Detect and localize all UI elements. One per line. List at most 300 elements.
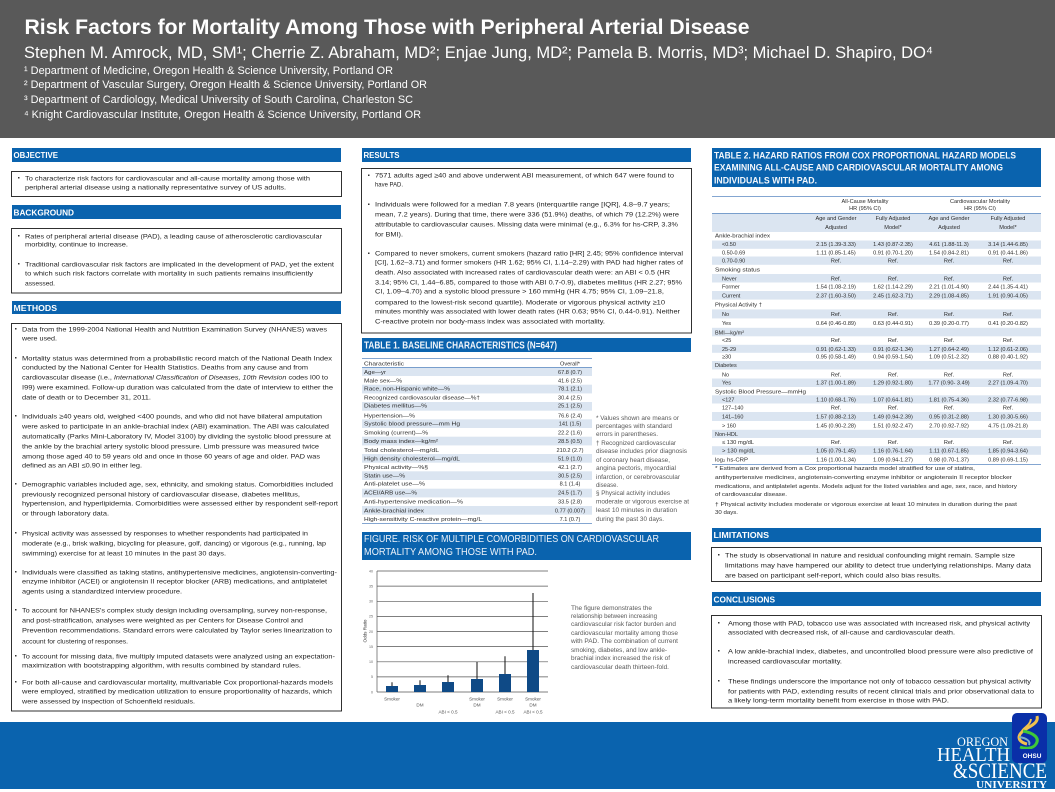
heading: results: [362, 148, 691, 162]
table 2: hazard ratios: 0.64 (0.46-0.89): [816, 321, 856, 327]
table 2: hazard ratios: Ref.: [944, 440, 955, 446]
header band: [0, 0, 1055, 138]
heading: results: RESULTS: [364, 151, 400, 160]
panel: methods: conducted by the National Center for Health Statistics. Deaths from any cause and from: [22, 364, 308, 372]
panel: methods: and post-stratification, analyses were weighted as per Centers for Disease Control and: [22, 618, 303, 624]
heading: table 2: TABLE 2. HAZARD RATIOS FROM COX PROPORTIONAL HAZARD MODELS: [714, 150, 1016, 160]
table 2: hazard ratios: Ref.: [888, 440, 899, 446]
table 2: hazard ratios: 0.98 (0.70-1.37): [929, 457, 969, 463]
table 1: baseline characteristics: 78.1 (2.1): [558, 387, 582, 393]
table 1: baseline characteristics: 0.77 (0.007): [555, 509, 585, 515]
table 2: hazard ratios: 0.91 (0.70-1.20): [873, 250, 913, 256]
logo: OHSU wordmark: HEALTH: [937, 744, 1010, 766]
table 1 footnotes: § Physical activity includes: [596, 490, 670, 497]
table 2: hazard ratios: 1.09 (0.51-2.32): [929, 355, 969, 361]
table 2: hazard ratios: 25-29: [722, 347, 736, 353]
table 2 footnotes: † Physical activity includes moderate or vigorous exercise at least 10 minutes in duration during the past: [715, 502, 1018, 508]
logo: OHSU wordmark: [937, 734, 1047, 791]
panel: objective: To characterize risk factors for cardiovascular and all-cause mortality among those with: [25, 176, 310, 182]
panel: methods: or through laboratory data.: [22, 510, 109, 518]
panel: limitations: limitations may have hampered our ability to detect true underlying relationships. Many data: [725, 562, 1031, 570]
table 2: hazard ratios: Ref.: [1003, 406, 1014, 412]
table 2: hazard ratios: 1.54 (1.08-2.19): [816, 285, 856, 291]
bar chart: odds ratio by comorbidity: DM: [529, 702, 537, 708]
table 2: hazard ratios: 2.70 (0.92-7.92): [929, 424, 969, 430]
panel: results: Compared to never smokers, current smokers (hazard ratio [HR] 2.45; 95% confidence interval: [375, 250, 684, 258]
table 2: hazard ratios: 4.75 (1.09-21.8): [988, 424, 1028, 430]
bar chart: odds ratio by comorbidity: Smoker: [469, 696, 485, 702]
heading: figure: MORTALITY AMONG THOSE WITH PAD.: [364, 547, 537, 558]
table 2: hazard ratios: Fully Adjusted: [991, 216, 1025, 222]
heading: limitations: LIMITATIONS: [714, 531, 770, 540]
panel: background: [12, 228, 342, 293]
table 2: hazard ratios: 1.85 (0.94-3.64): [988, 448, 1028, 454]
figure caption: cardiovascular mortality among those: [571, 630, 679, 637]
table 1: baseline characteristics: 141 (1.5): [559, 422, 581, 428]
bar chart: odds ratio by comorbidity: 10: [369, 660, 373, 664]
panel: results: death. Also associated with increased rates of cardiovascular death were: an ABI < 0.5 (HR: [375, 270, 670, 276]
panel: methods: were used.: [21, 336, 57, 342]
table 1: baseline characteristics: 33.5 (2.8): [558, 499, 582, 505]
table 2: hazard ratios: 2.15 (1.39-3.33): [816, 242, 856, 248]
table 1: baseline characteristics: 42.1 (2.7): [558, 465, 582, 471]
table 2: hazard ratios: Ref.: [888, 312, 899, 318]
table 1: baseline characteristics: 210.2 (2.7): [556, 448, 584, 454]
table 1: baseline characteristics: Diabetes mellitus—%: [364, 404, 427, 410]
table 2: hazard ratios: Ref.: [888, 276, 899, 282]
panel: background: to which such risk factors correlate with mortality in such patients remains insufficiently: [25, 270, 314, 278]
bar chart: odds ratio by comorbidity: Odds Ratio: [362, 619, 368, 642]
table 2: hazard ratios: 2.45 (1.62-3.71): [873, 293, 913, 299]
panel: methods: defined as an ABI ≤0.90 in either leg.: [22, 462, 142, 470]
table 2: hazard ratios: <127: [722, 397, 734, 403]
panel: methods: swimming) exercise for at least 10 minutes in the past 30 days.: [22, 550, 226, 558]
bar chart: odds ratio by comorbidity: 5: [371, 675, 373, 679]
panel: conclusions: These findings underscore the importance not only of tobacco cessation but physical activity: [728, 678, 1032, 686]
table 2: hazard ratios: 1.16 (1.00-1.34): [816, 457, 856, 463]
table 2: hazard ratios: Ref.: [888, 338, 899, 344]
table 1: baseline characteristics: Recognized cardiovascular disease—%†: [364, 395, 480, 401]
panel: conclusions: Among those with PAD, tobacco use was associated with increased risk, and physical activity: [728, 620, 1031, 628]
authors: Stephen M. Amrock, MD, SM¹; Cherrie Z. Abraham, MD²; Enjae Jung, MD²; Pamela B. Morris, MD³; Michael D. Shapiro, DO⁴: [24, 43, 933, 62]
table 1: baseline characteristics: Smoking (current)—%: [364, 430, 428, 436]
table 1: baseline characteristics: 8.1 (1.4): [560, 482, 581, 488]
table 2: hazard ratios: 0.95 (0.58-1.49): [816, 355, 856, 361]
table 1: baseline characteristics: Statin use—%: [364, 474, 405, 480]
panel: methods: were asked to participate in an ankle-brachial index (ABI) examination. The ABI was calculated: [21, 424, 329, 430]
table 2: hazard ratios: No: [722, 312, 729, 318]
panel: results: C-reactive protein nor body-mass index was associated with mortality.: [375, 318, 605, 326]
table 2: hazard ratios: BMI—kg/m²: [715, 330, 744, 336]
table 1: baseline characteristics: 30.5 (2.5): [558, 474, 582, 480]
table 2: hazard ratios: 1.57 (0.88-2.13): [816, 414, 856, 420]
panel: background: Traditional cardiovascular risk factors are implicated in the development of PAD, yet the extent: [25, 262, 334, 268]
panel: methods: Prevention recommendations. Standard errors were calculated by Taylor series linearization to: [22, 628, 332, 634]
table 1 footnotes: moderate or vigorous exercise at: [596, 498, 689, 506]
panel: objective: peripheral arterial disease using a nationally representative survey of US adults.: [25, 184, 286, 192]
heading: table 2: [712, 148, 1041, 187]
table 2: hazard ratios: Ref.: [1003, 338, 1014, 344]
table 1: baseline characteristics: Ankle-brachial index: [364, 509, 424, 515]
table 2: hazard ratios: ≥30: [722, 355, 731, 361]
heading: table 2: EXAMINING ALL-CAUSE AND CARDIOVASCULAR MORTALITY AMONG: [714, 162, 1003, 172]
table 1 footnotes: † Recognized cardiovascular: [596, 440, 676, 447]
table 2: hazard ratios: Smoking status: [715, 268, 760, 274]
table 2: hazard ratios: 2.37 (1.60-3.50): [816, 293, 856, 299]
table 2: hazard ratios: [712, 196, 1041, 465]
table 2: hazard ratios: 1.45 (0.90-2.28): [816, 424, 856, 430]
table 1: baseline characteristics: 41.6 (2.5): [558, 379, 582, 385]
bar chart: odds ratio by comorbidity: [362, 569, 548, 714]
table 1 footnotes: during the past 30 days.: [596, 516, 664, 523]
table 1: baseline characteristics: Physical activity—%§: [364, 465, 428, 471]
heading: table 2: INDIVIDUALS WITH PAD.: [714, 176, 817, 186]
table 2: hazard ratios: Yes: [722, 381, 731, 387]
table 2: hazard ratios: Age and Gender: [815, 216, 857, 222]
table 1: baseline characteristics: 67.8 (0.7): [558, 370, 582, 376]
table 1: baseline characteristics: 51.9 (1.0): [558, 457, 582, 463]
logo: OHSU wordmark: OREGON: [957, 734, 1009, 749]
bar chart: odds ratio by comorbidity: DM: [473, 702, 481, 708]
heading: conclusions: CONCLUSIONS: [714, 596, 776, 604]
table 2: hazard ratios: 0.88 (0.40-1.92): [988, 355, 1028, 361]
bar chart: odds ratio by comorbidity: ABI < 0.5: [523, 710, 543, 714]
table 1: baseline characteristics: High-sensitivity C-reactive protein—mg/L: [364, 517, 482, 523]
table 2: hazard ratios: <25: [722, 338, 731, 344]
panel: methods: among those aged 40 to 59 years old and once in those 60 years of age and older. PAD was: [22, 454, 321, 460]
table 2: hazard ratios: 1.43 (0.87-2.35): [873, 242, 913, 248]
table 2: hazard ratios: 3.14 (1.44-6.85): [988, 242, 1028, 248]
bar chart: odds ratio by comorbidity: ABI < 0.5: [495, 710, 515, 714]
table 1: baseline characteristics: Total cholesterol—mg/dL: [364, 448, 439, 454]
table 2: hazard ratios: 0.91 (0.44-1.86): [988, 250, 1028, 256]
figure caption: with PAD. The combination of current: [570, 638, 678, 645]
table 2: hazard ratios: Ref.: [831, 406, 842, 412]
panel: methods: date of death or to December 31, 2011.: [22, 394, 151, 402]
table 2: hazard ratios: 1.51 (0.92-2.47): [873, 424, 913, 430]
table 2: hazard ratios: Model*: [884, 225, 903, 231]
figure caption: smoking, diabetes, and low ankle-: [571, 647, 667, 654]
panel: results: compared to the lowest-risk second quartile). Moderate or vigorous physical activity ≥10: [375, 300, 665, 306]
table 2: hazard ratios: 2.21 (1.01-4.90): [929, 285, 969, 291]
table 2: hazard ratios: 2.32 (0.77-6.98): [988, 397, 1028, 403]
table 2: hazard ratios: 1.30 (0.30-5.66): [988, 414, 1028, 420]
panel: methods: Data from the 1999-2004 National Health and Nutrition Examination Survey (NHANES) waves: [22, 326, 328, 334]
table 2: hazard ratios: Fully Adjusted: [876, 216, 910, 222]
heading: methods: METHODS: [14, 304, 58, 313]
table 2: hazard ratios: Former: [722, 285, 740, 291]
table 1 footnotes: least 10 minutes in duration: [596, 507, 678, 514]
heading: figure: [362, 532, 691, 560]
affiliations: ³ Department of Cardiology, Medical University of South Carolina, Charleston SC: [24, 94, 413, 106]
panel: results: mean, 7.2 years). During that time, there were 336 (51.9%) deaths, of which 79 (12.2%) were: [375, 212, 679, 218]
table 1: baseline characteristics: Anti-hypertensive medication—%: [364, 499, 463, 505]
bar chart: odds ratio by comorbidity: 15: [369, 645, 373, 649]
table 2: hazard ratios: Ref.: [1003, 276, 1014, 282]
panel: results: for BMI).: [375, 232, 403, 238]
table 2: hazard ratios: 0.70-0.90: [722, 259, 745, 265]
table 2: hazard ratios: ≤ 130 mg/dL: [722, 440, 754, 446]
table 1: baseline characteristics: Age—yr: [364, 370, 386, 376]
table 2: hazard ratios: 127–140: [722, 406, 743, 412]
panel: conclusions: A low ankle-brachial index, diabetes, and uncontrolled blood pressure were also predictive of: [728, 648, 1033, 656]
table 1: baseline characteristics: [362, 358, 592, 524]
table 2: hazard ratios: Ref.: [831, 259, 842, 265]
bar chart: odds ratio by comorbidity: Smoker: [525, 696, 541, 702]
heading: objective: [12, 148, 341, 162]
table 2: hazard ratios: 1.91 (0.90-4.05): [988, 293, 1028, 299]
bar chart: odds ratio by comorbidity: 20: [369, 630, 373, 634]
table 1 footnotes: errors in parentheses.: [596, 431, 658, 438]
icon: OHSU helix shield: [1012, 713, 1047, 763]
panel: methods: automatically (Parks Mini-Laboratory IV, Model 3100) by dividing the systolic blood pressure at: [22, 434, 331, 440]
panel: results: Individuals were followed for a median 7.8 years (interquartile range [IQR], 4.8–9.7 years;: [375, 202, 670, 208]
panel: results: CI, 1.09–4.70) and a systolic blood pressure > 160 mmHg (HR 4.75; 95% CI, 1.09–21.8,: [375, 288, 664, 296]
bar chart: odds ratio by comorbidity: 30: [369, 600, 373, 604]
panel: results: attributable to cardiovascular causes. Missing data were minimal (e.g., 6.3% for hs-CRP, 3.3%: [375, 222, 678, 228]
table 2: hazard ratios: Ref.: [831, 276, 842, 282]
table 2: hazard ratios: > 160: [722, 424, 736, 430]
table 2: hazard ratios: Ref.: [831, 440, 842, 446]
heading: conclusions: [712, 592, 1041, 606]
panel: results: 7571 adults aged ≥40 and above underwent ABI measurement, of which 647 were found to: [375, 172, 674, 180]
table 1: baseline characteristics: 22.2 (1.6): [558, 430, 582, 436]
panel: methods: To account for missing data, five multiply imputed datasets were analyzed using an expectation-: [22, 654, 335, 660]
table 2: hazard ratios: 2.29 (1.08-4.85): [929, 293, 969, 299]
figure caption: cardiovascular death thirteen-fold.: [571, 664, 669, 671]
table 2: hazard ratios: HR (95% CI): [964, 206, 996, 212]
table 1: baseline characteristics: Anti-platelet use—%: [364, 482, 425, 488]
table 1: baseline characteristics: 30.4 (2.5): [558, 395, 582, 401]
panel: methods: Individuals ≥40 years old, weighed <400 pounds, and who did not have bilateral amputation: [22, 414, 322, 420]
panel: background: morbidity, continue to increase.: [25, 242, 128, 248]
icon: OHSU helix shield: OHSU: [1023, 753, 1042, 760]
logo: OHSU wordmark: UNIVERSITY: [976, 780, 1047, 791]
table 2: hazard ratios: 2.44 (1.35-4.41): [988, 285, 1028, 291]
table 1: baseline characteristics: High density cholesterol—mg/dL: [364, 457, 460, 463]
heading: objective: OBJECTIVE: [14, 151, 59, 160]
table 2: hazard ratios: Non-HDL: [715, 432, 738, 438]
panel: methods: Demographic variables included age, sex, ethnicity, and smoking status. Comorbidities included: [22, 482, 333, 488]
table 2: hazard ratios: Adjusted: [938, 225, 960, 231]
table 2: hazard ratios: Current: [722, 293, 741, 299]
table 2: hazard ratios: Ref.: [831, 338, 842, 344]
table 2: hazard ratios: 1.11 (0.67-1.85): [929, 448, 969, 454]
panel: results: have PAD.: [375, 182, 403, 188]
table 2: hazard ratios: Model*: [999, 225, 1018, 231]
panel: methods: were assessed by inspection of Schoenfield residuals.: [21, 698, 195, 706]
table 1: baseline characteristics: Systolic blood pressure—mm Hg: [364, 422, 460, 428]
figure caption: The figure demonstrates the: [571, 605, 653, 612]
table 2: hazard ratios: 0.94 (0.59-1.54): [873, 355, 913, 361]
table 2: hazard ratios: Ref.: [944, 259, 955, 265]
panel: methods: account for clustering of responses.: [22, 638, 128, 646]
table 1 footnotes: disease includes prior diagnosis: [596, 448, 687, 455]
table 2: hazard ratios: 1.09 (0.94-1.27): [873, 457, 913, 463]
table 2: hazard ratios: Adjusted: [825, 225, 847, 231]
table 2: hazard ratios: 0.50-0.69: [722, 250, 745, 256]
panel: methods: cardiovascular disease (i.e., International Classification of Diseases, 10th Revision codes I00 to: [22, 374, 328, 382]
table 2: hazard ratios: 141–160: [722, 414, 743, 420]
table 2: hazard ratios: > 130 mg/dL: [722, 448, 755, 454]
table 2: hazard ratios: 1.12 (0.61-2.06): [988, 347, 1028, 353]
table 2: hazard ratios: 1.29 (0.92-1.80): [873, 381, 913, 387]
table 2: hazard ratios: 1.16 (0.76-1.64): [873, 448, 913, 454]
panel: methods: To account for NHANES's complex study design including oversampling, survey non-response,: [22, 608, 327, 614]
table 1 footnotes: [596, 415, 689, 523]
table 2: hazard ratios: Ref.: [944, 338, 955, 344]
table 1 footnotes: disease.: [596, 482, 618, 489]
table 2 footnotes: medications, and antiplatelet agents. Models adjust for the listed variables and age, sex, race, and history: [715, 484, 1017, 490]
table 2: hazard ratios: Ref.: [1003, 312, 1014, 318]
table 2: hazard ratios: 1.07 (0.64-1.81): [873, 397, 913, 403]
affiliations: ¹ Department of Medicine, Oregon Health & Science University, Portland OR: [24, 65, 393, 77]
table 2: hazard ratios: 0.89 (0.69-1.15): [988, 457, 1028, 463]
panel: objective: [12, 172, 342, 196]
bar chart: odds ratio by comorbidity: DM: [416, 702, 424, 708]
table 2: hazard ratios: 4.61 (1.88-11.3): [929, 242, 969, 248]
panel: conclusions: [712, 616, 1042, 708]
bar chart: odds ratio by comorbidity: 40: [369, 569, 373, 573]
panel: limitations: are based on participant self-report, which could also bias results.: [725, 572, 941, 580]
table 1: baseline characteristics: 24.5 (1.7): [558, 491, 582, 497]
panel: methods: maximization with bootstrapping algorithm, with results combined by standard rules.: [22, 662, 301, 670]
heading: limitations: [712, 528, 1041, 542]
table 2: hazard ratios: 0.95 (0.31-2.88): [929, 414, 969, 420]
footer band: [0, 722, 1055, 789]
table 2: hazard ratios: 1.05 (0.79-1.45): [816, 448, 856, 454]
panel: methods: [12, 324, 342, 711]
table 1 footnotes: infarction, or cerebrovascular: [596, 474, 680, 481]
table 1 footnotes: * Values shown are means or: [596, 415, 679, 422]
table 2: hazard ratios: Ref.: [1003, 372, 1014, 378]
table 2: hazard ratios: Ref.: [888, 372, 899, 378]
table 2: hazard ratios: Ankle-brachial index: [715, 234, 770, 240]
table 2: hazard ratios: 0.39 (0.20-0.77): [929, 321, 969, 327]
heading: methods: [12, 301, 341, 314]
table 2: hazard ratios: 1.37 (1.00-1.89): [816, 381, 856, 387]
panel: results: [362, 168, 692, 333]
table 2: hazard ratios: All-Cause Mortality: [842, 199, 889, 205]
table 1: baseline characteristics: Race, non-Hispanic white—%: [364, 387, 450, 393]
panel: results: 3.14; 95% CI, 1.44–6.85, compared to those with ABI 0.7-0.9), diabetes mellitus (HR 2.27; 95%: [375, 280, 682, 286]
heading: background: [12, 205, 341, 219]
table 2: hazard ratios: Ref.: [1003, 440, 1014, 446]
bar chart: odds ratio by comorbidity: 0: [371, 690, 373, 694]
heading: table 1: [362, 338, 691, 352]
table 2: hazard ratios: 0.63 (0.44-0.91): [873, 321, 913, 327]
panel: background: Rates of peripheral arterial disease (PAD), a leading cause of atherosclerotic cardiovascular: [25, 234, 323, 240]
panel: conclusions: increased cardiovascular mortality.: [728, 658, 842, 666]
table 1 footnotes: of coronary heart disease,: [596, 457, 670, 464]
table 2 footnotes: * Estimates are derived from a Cox proportional hazards model stratified for use of statins,: [715, 466, 976, 472]
table 2: hazard ratios: 0.41 (0.20-0.82): [988, 321, 1028, 327]
table 2: hazard ratios: 0.91 (0.62-1.34): [873, 347, 913, 353]
table 2: hazard ratios: 0.91 (0.62-1.33): [816, 347, 856, 353]
table 2 footnotes: [715, 466, 1018, 516]
table 1: baseline characteristics: Hypertension—%: [364, 413, 415, 419]
table 2: hazard ratios: Age and Gender: [928, 216, 970, 222]
panel: methods: enzyme inhibitor (ACEI) or angiotensin II receptor blocker (ARB) medications, and antiplatelet: [22, 578, 327, 586]
panel: conclusions: for patients with PAD, extending results of recent clinical trials and prior observational data to: [728, 688, 1034, 696]
table 2: hazard ratios: Ref.: [831, 312, 842, 318]
bar chart: odds ratio by comorbidity: 35: [369, 584, 373, 588]
figure caption: relationship between increasing: [571, 613, 658, 620]
table 2: hazard ratios: Yes: [722, 321, 731, 327]
table 2: hazard ratios: HR (95% CI): [849, 206, 881, 212]
affiliations: ² Department of Vascular Surgery, Oregon Health & Science University, Portland OR: [24, 79, 427, 91]
table 2: hazard ratios: Cardiovascular Mortality: [950, 199, 1010, 205]
panel: limitations: The study is observational in nature and residual confounding might remain. Sample size: [725, 552, 1015, 560]
panel: methods: Physical activity was assessed by responses to whether respondents had participated in: [22, 530, 308, 538]
heading: figure: FIGURE. RISK OF MULTIPLE COMORBIDITIES ON CARDIOVASCULAR: [364, 534, 659, 545]
title: Risk Factors for Mortality Among Those with Peripheral Arterial Disease: [24, 16, 750, 39]
panel: methods: For both all-cause and cardiovascular mortality, multivariable Cox proportional-hazards models: [22, 680, 334, 686]
figure caption: [570, 605, 679, 671]
bar chart: odds ratio by comorbidity: ABI < 0.5: [438, 710, 458, 714]
table 2: hazard ratios: 1.62 (1.14-2.29): [873, 285, 913, 291]
bar chart: odds ratio by comorbidity: Smoker: [497, 696, 513, 702]
table 1: baseline characteristics: ACEI/ARB use—%: [364, 491, 417, 497]
heading: table 1: TABLE 1. BASELINE CHARACTERISTICS (N=647): [364, 340, 557, 352]
affiliations: [24, 65, 427, 121]
table 2: hazard ratios: 1.10 (0.68-1.76): [816, 397, 856, 403]
table 1: baseline characteristics: 76.6 (2.4): [558, 413, 582, 419]
table 1: baseline characteristics: Male sex—%: [364, 379, 402, 385]
panel: methods: I99) were examined. Follow-up duration was calculated from the date of interview to either the: [22, 384, 333, 392]
table 2: hazard ratios: Ref.: [944, 276, 955, 282]
table 1: baseline characteristics: Characteristic: [364, 361, 404, 367]
panel: limitations: [712, 548, 1042, 582]
table 2: hazard ratios: 2.27 (1.09-4.70): [988, 381, 1028, 387]
table 1 footnotes: angina pectoris, myocardial: [596, 465, 676, 472]
panel: methods: were employed, stratified by medication utilization to ensure proportionality of hazards, which: [21, 688, 332, 696]
table 1: baseline characteristics: 28.5 (0.5): [558, 439, 582, 445]
table 2: hazard ratios: Ref.: [1003, 259, 1014, 265]
panel: results: minutes monthly was associated with lower death rates (HR 0.63; 95% CI, 0.44-0.91). Neither: [375, 308, 681, 316]
table 1: baseline characteristics: Overall*: [560, 361, 581, 367]
table 2: hazard ratios: Physical Activity †: [715, 303, 762, 309]
table 2: hazard ratios: Ref.: [944, 312, 955, 318]
table 2: hazard ratios: 1.11 (0.85-1.45): [816, 250, 856, 256]
panel: methods: Mortality status was determined from a probabilistic record match of the National Death Index: [22, 356, 333, 362]
table 2: hazard ratios: 1.49 (0.94-2.39): [873, 414, 913, 420]
table 2: hazard ratios: 1.54 (0.84-2.81): [929, 250, 969, 256]
table 2: hazard ratios: 1.77 (0.90- 3.49): [928, 381, 970, 387]
figure caption: brachial index increased the risk of: [571, 655, 670, 662]
panel: methods: the ankle by the brachial artery systolic blood pressure. Limb pressure was measured twice: [22, 444, 319, 450]
table 2: hazard ratios: log₂ hs-CRP: [715, 457, 748, 463]
table 2 footnotes: of cardiovascular disease.: [715, 492, 788, 498]
table 2: hazard ratios: Diabetes: [715, 363, 737, 369]
table 2: hazard ratios: Ref.: [888, 406, 899, 412]
table 1 footnotes: percentages with standard: [596, 423, 673, 430]
figure caption: cardiovascular risk factor burden and: [571, 621, 677, 628]
table 2: hazard ratios: <0.50: [722, 242, 736, 248]
table 2: hazard ratios: Ref.: [944, 406, 955, 412]
table 2: hazard ratios: No: [722, 372, 729, 378]
bar chart: odds ratio by comorbidity: Smoker: [384, 696, 400, 702]
table 2: hazard ratios: Ref.: [944, 372, 955, 378]
table 2: hazard ratios: Systolic Blood Pressure—mmHg: [715, 389, 806, 395]
table 2: hazard ratios: Never: [722, 276, 737, 282]
panel: methods: moderate (e.g., brisk walking, bicycling for pleasure, golf, dancing) or vigorous (e.g., running, lap: [22, 540, 326, 548]
table 2 footnotes: 30 days.: [715, 510, 739, 516]
table 1: baseline characteristics: Body mass index—kg/m²: [364, 439, 438, 445]
table 1: baseline characteristics: 25.1 (2.5): [558, 404, 582, 410]
panel: conclusions: a likely long-term mortality benefit from exercise in those with PAD.: [728, 698, 949, 704]
affiliations: ⁴ Knight Cardiovascular Institute, Oregon Health & Science University, Portland OR: [24, 109, 421, 121]
